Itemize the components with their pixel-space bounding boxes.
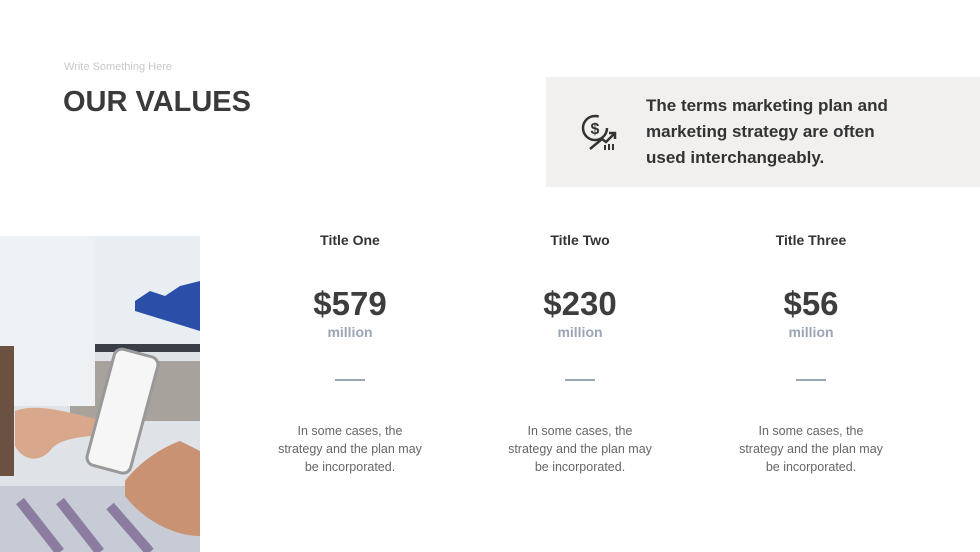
column: Title Three: be incorporated. bbox=[766, 460, 856, 474]
callout panel bbox=[546, 77, 980, 187]
column: Title One: In some cases, the bbox=[298, 424, 402, 438]
column: Title Two bbox=[508, 232, 652, 474]
column: Title Three: $56 bbox=[783, 285, 839, 322]
column: Title Two: Title Two bbox=[550, 232, 610, 248]
column: Title Three: In some cases, the bbox=[759, 424, 863, 438]
column: Title One bbox=[278, 232, 422, 474]
column: Title Three bbox=[739, 232, 883, 474]
column: Title Three: Title Three bbox=[776, 232, 846, 248]
photo: phone in hands bbox=[0, 236, 200, 552]
column: Title Two: $230 bbox=[543, 285, 617, 322]
column: Title Three: million bbox=[788, 324, 834, 340]
icon: dollar growth: $ bbox=[591, 121, 600, 138]
icon: dollar growth bbox=[582, 114, 616, 150]
column: Title One: strategy and the plan may bbox=[278, 442, 422, 456]
column: Title Two: million bbox=[557, 324, 603, 340]
column: Title Two: be incorporated. bbox=[535, 460, 625, 474]
column: Title Three: strategy and the plan may bbox=[739, 442, 883, 456]
callout text: The terms marketing plan and marketing strategy are often used interchangeably. bbox=[646, 96, 888, 167]
column: Title Two: strategy and the plan may bbox=[508, 442, 652, 456]
column: Title One: be incorporated. bbox=[305, 460, 395, 474]
column: Title Two: In some cases, the bbox=[528, 424, 632, 438]
subtitle: Write Something Here bbox=[64, 61, 172, 73]
column: Title One: Title One bbox=[320, 232, 380, 248]
column: Title One: $579 bbox=[313, 285, 387, 322]
title: OUR VALUES bbox=[63, 86, 251, 118]
column: Title One: million bbox=[327, 324, 373, 340]
